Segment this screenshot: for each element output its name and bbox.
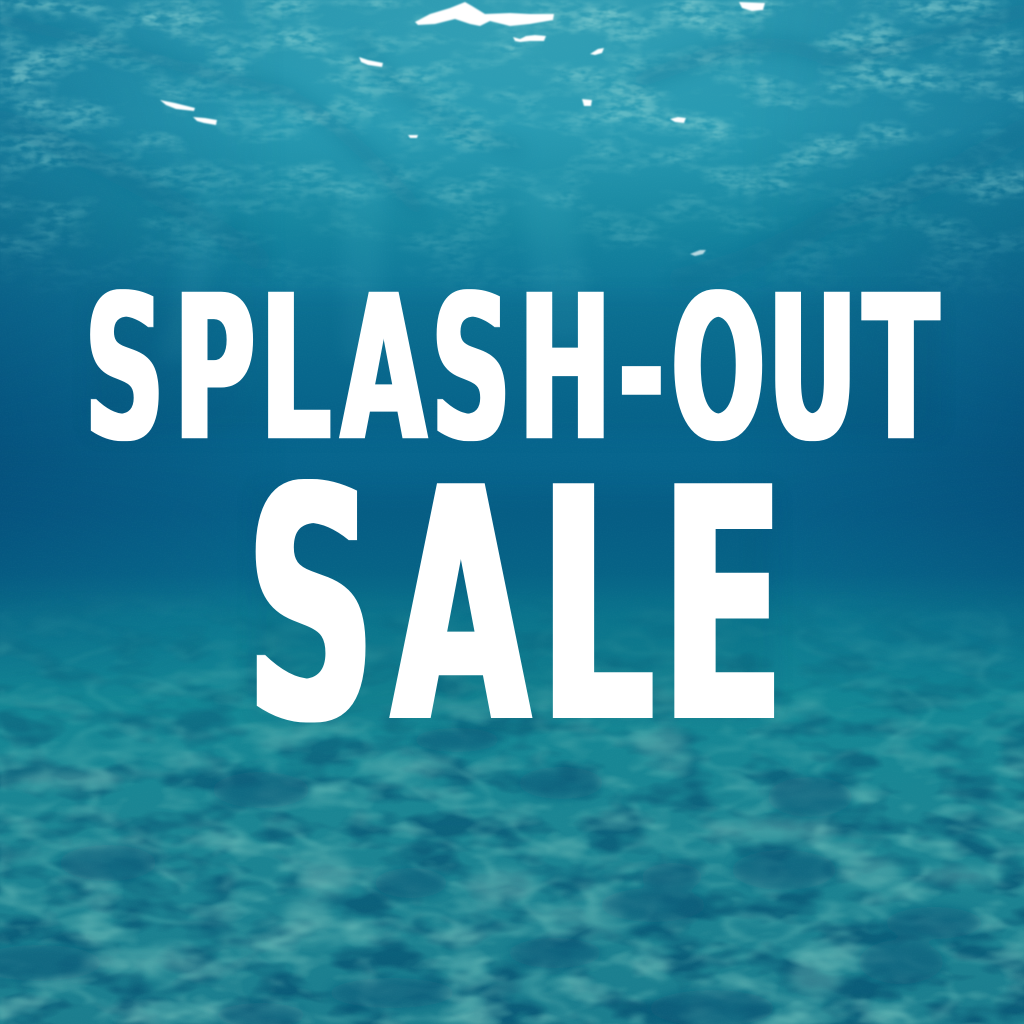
text shadow xyxy=(90,295,938,716)
headline line 2: SALE xyxy=(247,421,783,795)
surface sun glints xyxy=(160,2,765,256)
sand caustic highlights xyxy=(15,728,1000,995)
surface ripples xyxy=(0,0,1024,300)
sand shadow dunes xyxy=(0,728,982,1024)
surface glow xyxy=(0,0,1024,420)
dark wave bands xyxy=(0,10,1024,280)
sandy sea floor xyxy=(0,590,1024,1024)
light rays xyxy=(160,170,590,360)
headline line 1: SPLASH-OUT xyxy=(85,252,939,487)
side darkening xyxy=(0,0,1024,669)
